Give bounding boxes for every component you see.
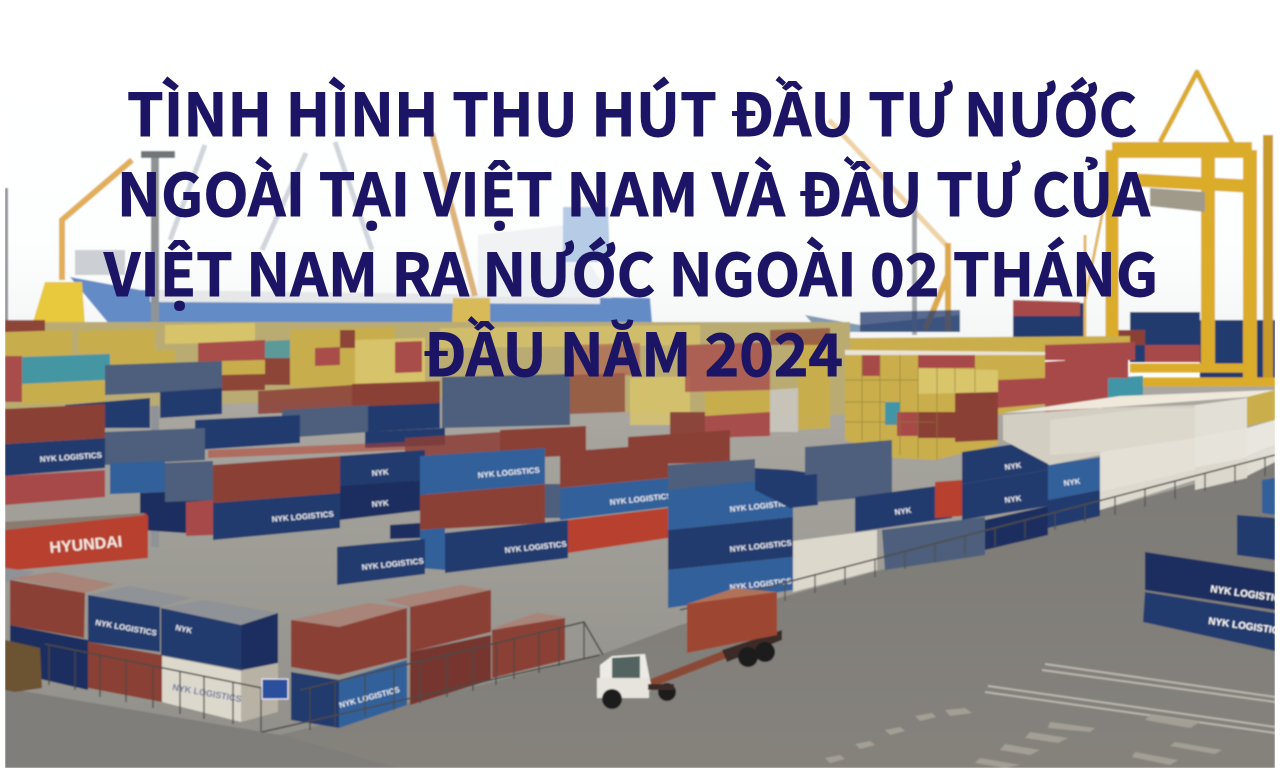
pale quay cranes bbox=[170, 142, 372, 250]
centre-right stacks: NYK bbox=[1004, 494, 1022, 505]
centre-right stacks: NYK LOGISTICS bbox=[729, 498, 793, 514]
pavement patches bbox=[825, 708, 1222, 768]
perimeter fence left bbox=[45, 622, 603, 732]
centre-left stacks: NYK bbox=[371, 468, 389, 478]
yard ground bbox=[5, 385, 1275, 768]
centre-left stacks: NYK LOGISTICS bbox=[504, 539, 568, 555]
foreground centre containers: NYK LOGISTICS bbox=[338, 685, 401, 710]
title: TÌNH HÌNH THU HÚT ĐẦU TƯ NƯỚC bbox=[127, 68, 1137, 153]
mid navy rows bbox=[65, 361, 755, 536]
centre-left stacks: NYK bbox=[371, 499, 389, 509]
centre-right stacks bbox=[668, 439, 1100, 608]
centre-right stacks: NYK LOGISTICS bbox=[729, 538, 793, 554]
light poles bbox=[5, 151, 917, 547]
wood pallets bbox=[5, 640, 42, 692]
far right back stacks bbox=[860, 300, 1275, 380]
centre-right stacks: NYK LOGISTICS bbox=[729, 576, 793, 592]
title: ĐẦU NĂM 2024 bbox=[423, 308, 843, 393]
foreground left containers: NYK LOGISTICS bbox=[172, 682, 242, 704]
sky bbox=[6, 68, 1275, 340]
left stack: NYK LOGISTICS bbox=[40, 451, 103, 464]
Hyundai container: HYUNDAI bbox=[49, 534, 123, 557]
foreground left containers bbox=[5, 568, 278, 722]
hazy container backing bbox=[5, 322, 1135, 415]
left yellow crane bbox=[32, 160, 132, 325]
foreground left containers: NYK bbox=[175, 623, 193, 636]
ship bbox=[70, 207, 960, 332]
title: VIỆT NAM RA NƯỚC NGOÀI 02 THÁNG bbox=[103, 228, 1158, 313]
road markings bbox=[985, 664, 1275, 733]
lower-left pavement bbox=[18, 690, 196, 722]
title bbox=[103, 68, 1158, 393]
foreground left containers: NYK LOGISTICS bbox=[95, 618, 158, 638]
far right NYK containers bbox=[1143, 478, 1281, 651]
title: NGOÀI TẠI VIỆT NAM VÀ ĐẦU TƯ CỦA bbox=[117, 148, 1150, 233]
centre-left stacks: NYK LOGISTICS bbox=[609, 491, 673, 507]
white reefer stacks bbox=[1003, 390, 1275, 510]
centre-left stacks: NYK LOGISTICS bbox=[477, 466, 541, 480]
centre-right stacks: NYK bbox=[1004, 461, 1022, 472]
warning sign bbox=[262, 679, 288, 699]
centre-right stacks: NYK bbox=[894, 506, 912, 517]
gantry spreader bbox=[1150, 188, 1205, 212]
centre-left stacks: NYK LOGISTICS bbox=[361, 556, 425, 572]
back container rows bbox=[5, 320, 830, 438]
truck with red container bbox=[597, 588, 782, 709]
Hyundai container bbox=[5, 513, 148, 571]
foreground centre containers bbox=[291, 585, 565, 728]
centre-left stacks bbox=[213, 444, 673, 585]
centre yellow and red stack bbox=[845, 350, 1143, 460]
left stack bbox=[5, 404, 105, 505]
road asphalt bbox=[282, 462, 1275, 768]
far pale crane bbox=[829, 120, 948, 332]
perimeter fence right bbox=[680, 455, 1275, 624]
yellow gantry crane bbox=[1085, 72, 1275, 385]
centre-left stacks: NYK LOGISTICS bbox=[271, 510, 335, 524]
centre orange crane bbox=[432, 133, 490, 322]
centre-right stacks: NYK bbox=[1063, 477, 1081, 488]
